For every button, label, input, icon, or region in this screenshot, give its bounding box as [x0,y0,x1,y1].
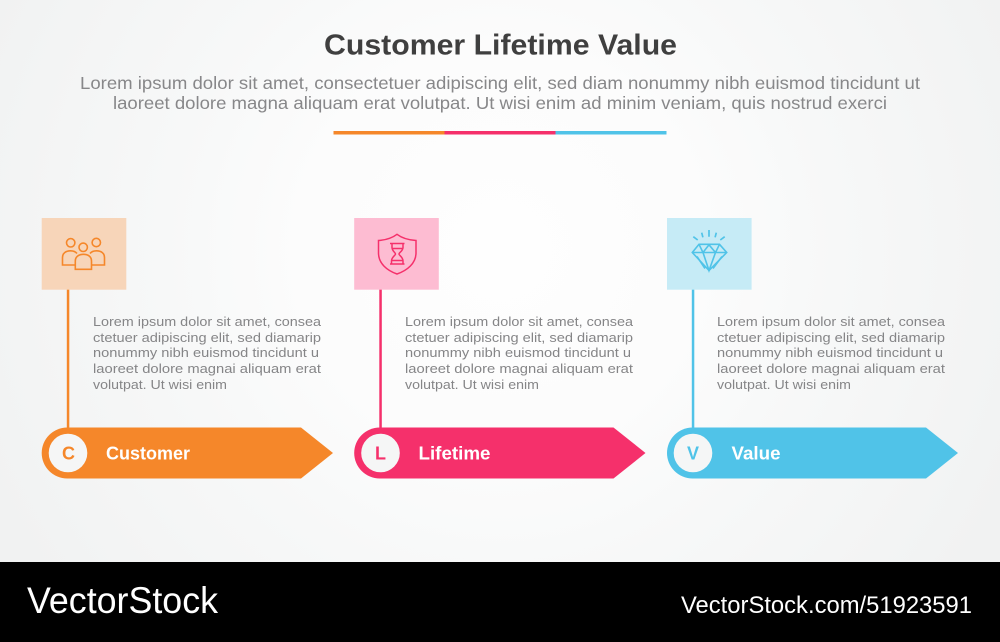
subtitle text: Lorem ipsum dolor sit amet, consectetuer adipiscing elit, sed diam nonummy nibh euismod tincidunt ut [80,73,920,93]
panel: value [667,218,958,478]
footer logo: VectorStock [27,580,218,621]
arrow label: value: Value [732,442,780,464]
connector line [67,289,69,429]
description text: Lorem ipsum dolor sit amet, consea [93,314,322,329]
description text: nonummy nibh euismod tincidunt u [93,345,319,360]
arrow label: customer: C [62,444,75,464]
description text [717,314,946,392]
description text: ctetuer adipiscing elit, sed diamarip [405,330,633,345]
description text: nonummy nibh euismod tincidunt u [717,345,943,360]
description text: laoreet dolore magnai aliquam erat [405,361,633,376]
description text: volutpat. Ut wisi enim [405,377,539,392]
description text [93,314,322,392]
description text: Lorem ipsum dolor sit amet, consea [405,314,634,329]
title: Customer Lifetime Value [324,30,677,62]
arrow label: lifetime: Lifetime [418,442,490,464]
panel: lifetime [354,218,646,478]
arrow label: lifetime [354,428,646,478]
subtitle text [80,73,920,113]
description text: laoreet dolore magnai aliquam erat [717,361,945,376]
panel: customer [42,218,333,478]
arrow label: lifetime: L [375,444,386,464]
arrow label: customer [42,428,333,478]
footer bar [0,562,1000,642]
description text: nonummy nibh euismod tincidunt u [405,345,631,360]
tri-colour divider [334,131,666,134]
description text [405,314,634,392]
description text: volutpat. Ut wisi enim [93,377,227,392]
footer url: VectorStock.com/51923591 [681,592,972,619]
description text: laoreet dolore magnai aliquam erat [93,361,321,376]
icon box: shield with hourglass [354,218,439,290]
description text: volutpat. Ut wisi enim [717,377,851,392]
arrow label: value [667,428,958,478]
description text: ctetuer adipiscing elit, sed diamarip [93,330,321,345]
connector line [379,289,382,429]
subtitle text: laoreet dolore magna aliquam erat volutpat. Ut wisi enim ad minim veniam, quis nostrud exerci [113,93,887,113]
icon box: diamond [667,218,752,290]
description text: ctetuer adipiscing elit, sed diamarip [717,330,945,345]
icon box: people [42,218,126,290]
arrow label: customer: Customer [106,442,190,464]
description text: Lorem ipsum dolor sit amet, consea [717,314,946,329]
connector line [692,289,694,429]
arrow label: value: V [687,444,699,464]
